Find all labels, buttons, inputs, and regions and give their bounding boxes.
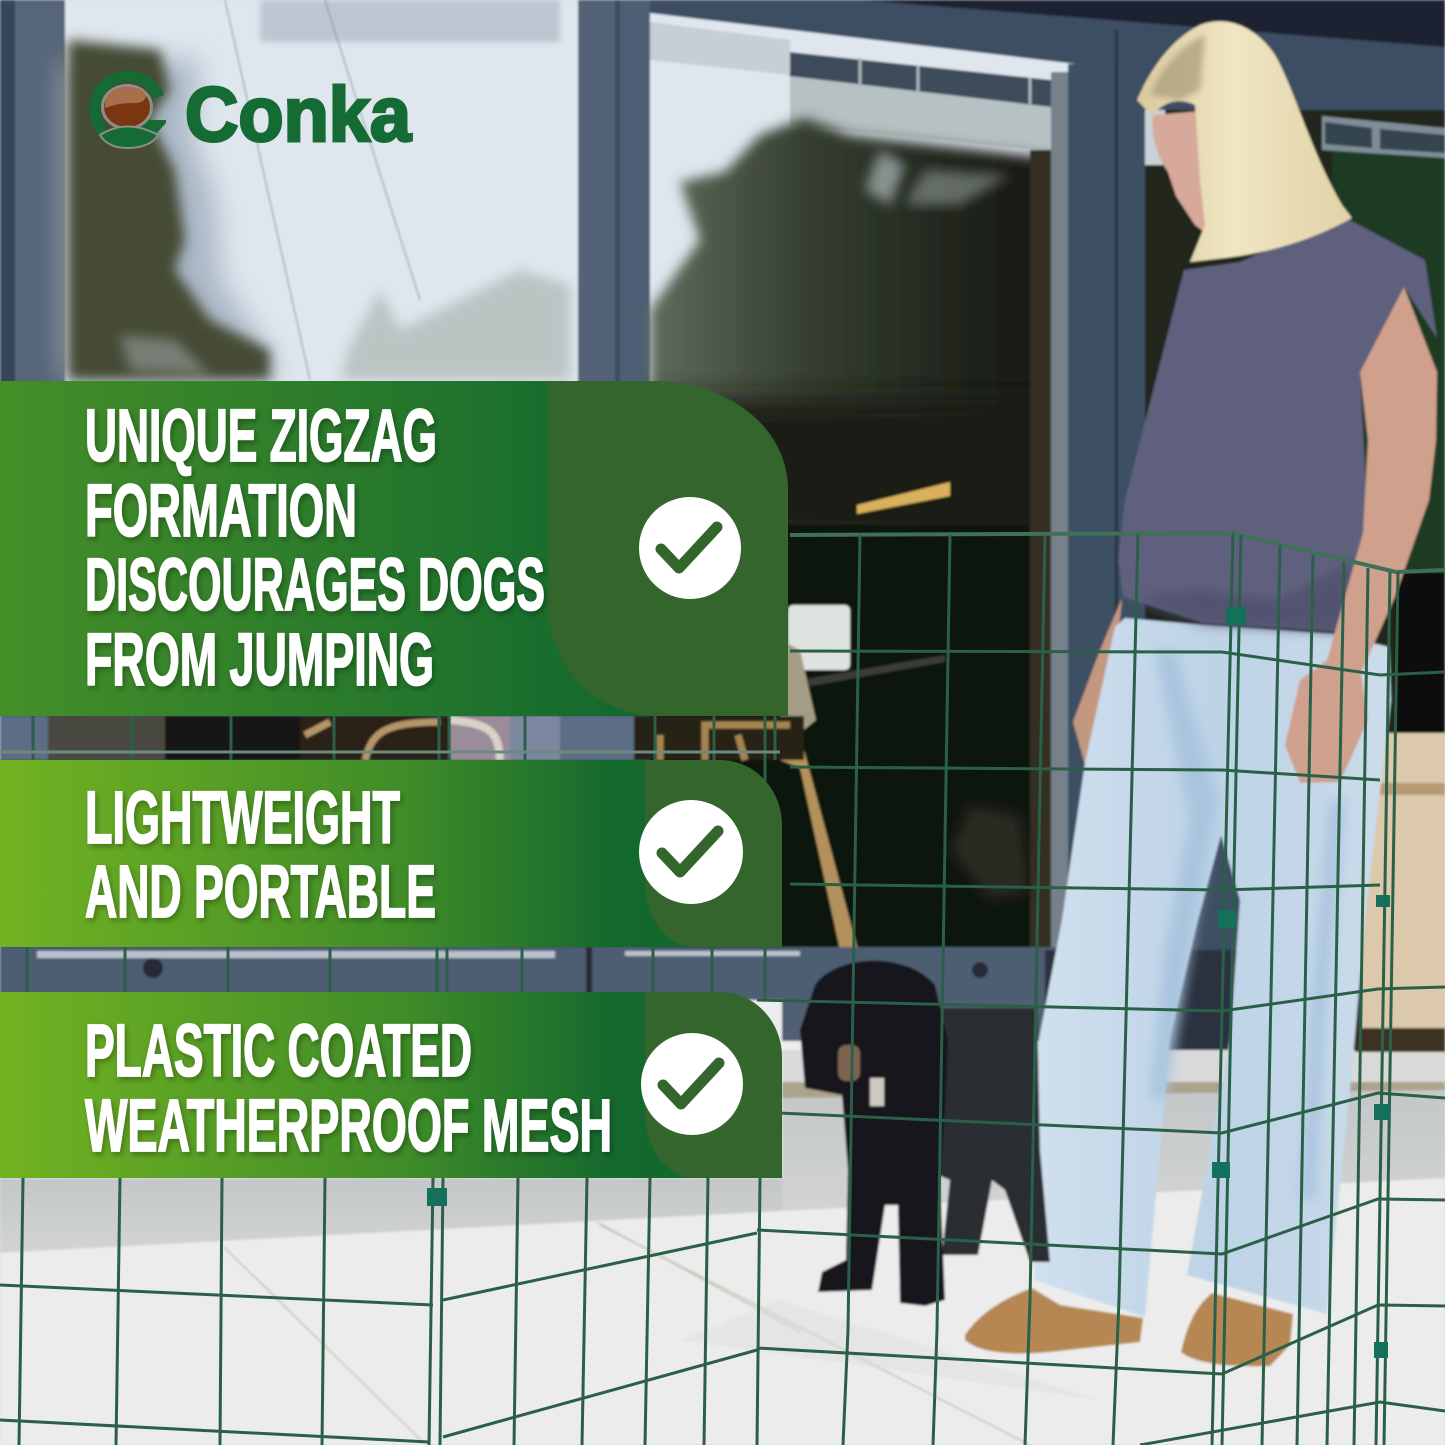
panel tab xyxy=(645,992,782,1178)
woman: jeans shading xyxy=(1150,650,1345,1200)
heading text: PLASTIC COATED xyxy=(85,1009,472,1092)
heading text: WEATHERPROOF MESH xyxy=(85,1084,612,1167)
panel tab xyxy=(645,760,782,947)
woman: left arm xyxy=(1073,598,1122,765)
heading text: AND PORTABLE xyxy=(85,850,436,933)
green mesh fence xyxy=(0,533,1445,1445)
dog body xyxy=(845,1008,1050,1262)
icon: check xyxy=(639,497,741,599)
heading text xyxy=(85,776,436,933)
logo wordmark: Conka xyxy=(185,72,412,158)
woman: shoes xyxy=(965,1288,1143,1354)
panel tab xyxy=(548,381,788,716)
heading text: UNIQUE ZIGZAG xyxy=(85,394,437,477)
heading text: FROM JUMPING xyxy=(85,618,434,701)
woman xyxy=(965,21,1437,1366)
window building frame xyxy=(0,0,1445,1000)
reflected shrub xyxy=(950,805,1030,900)
icon: check xyxy=(639,800,743,904)
tree reflection, right pane xyxy=(650,22,1145,955)
chair xyxy=(780,640,816,733)
woman: jeans xyxy=(1034,618,1391,1317)
logo xyxy=(95,72,412,158)
shelf and bowl xyxy=(788,605,850,670)
heading text: DISCOURAGES DOGS xyxy=(85,543,545,626)
icon: logo mark xyxy=(95,76,166,148)
panel: zigzag formation xyxy=(0,381,788,716)
panel: lightweight xyxy=(0,760,782,947)
tree reflection, left pane xyxy=(65,0,570,380)
lower frame and patio step xyxy=(0,733,1445,1445)
fence clips xyxy=(427,607,1390,1358)
heading text xyxy=(85,394,545,701)
icon: check xyxy=(641,1033,743,1135)
panel: weatherproof xyxy=(0,992,782,1178)
woman: arm and hand xyxy=(1285,287,1437,783)
woman: grey top xyxy=(1118,216,1437,632)
heading text xyxy=(85,1009,612,1167)
vents above window xyxy=(789,52,1060,108)
woman: face xyxy=(1152,110,1240,240)
strip between first and second panel xyxy=(0,716,804,760)
dog xyxy=(800,961,1050,1306)
dog head and legs xyxy=(800,961,948,1306)
dog muzzle xyxy=(838,1045,860,1081)
woman: blonde hair xyxy=(1137,21,1352,262)
heading text: FORMATION xyxy=(85,469,357,552)
heading text: LIGHTWEIGHT xyxy=(85,776,400,859)
